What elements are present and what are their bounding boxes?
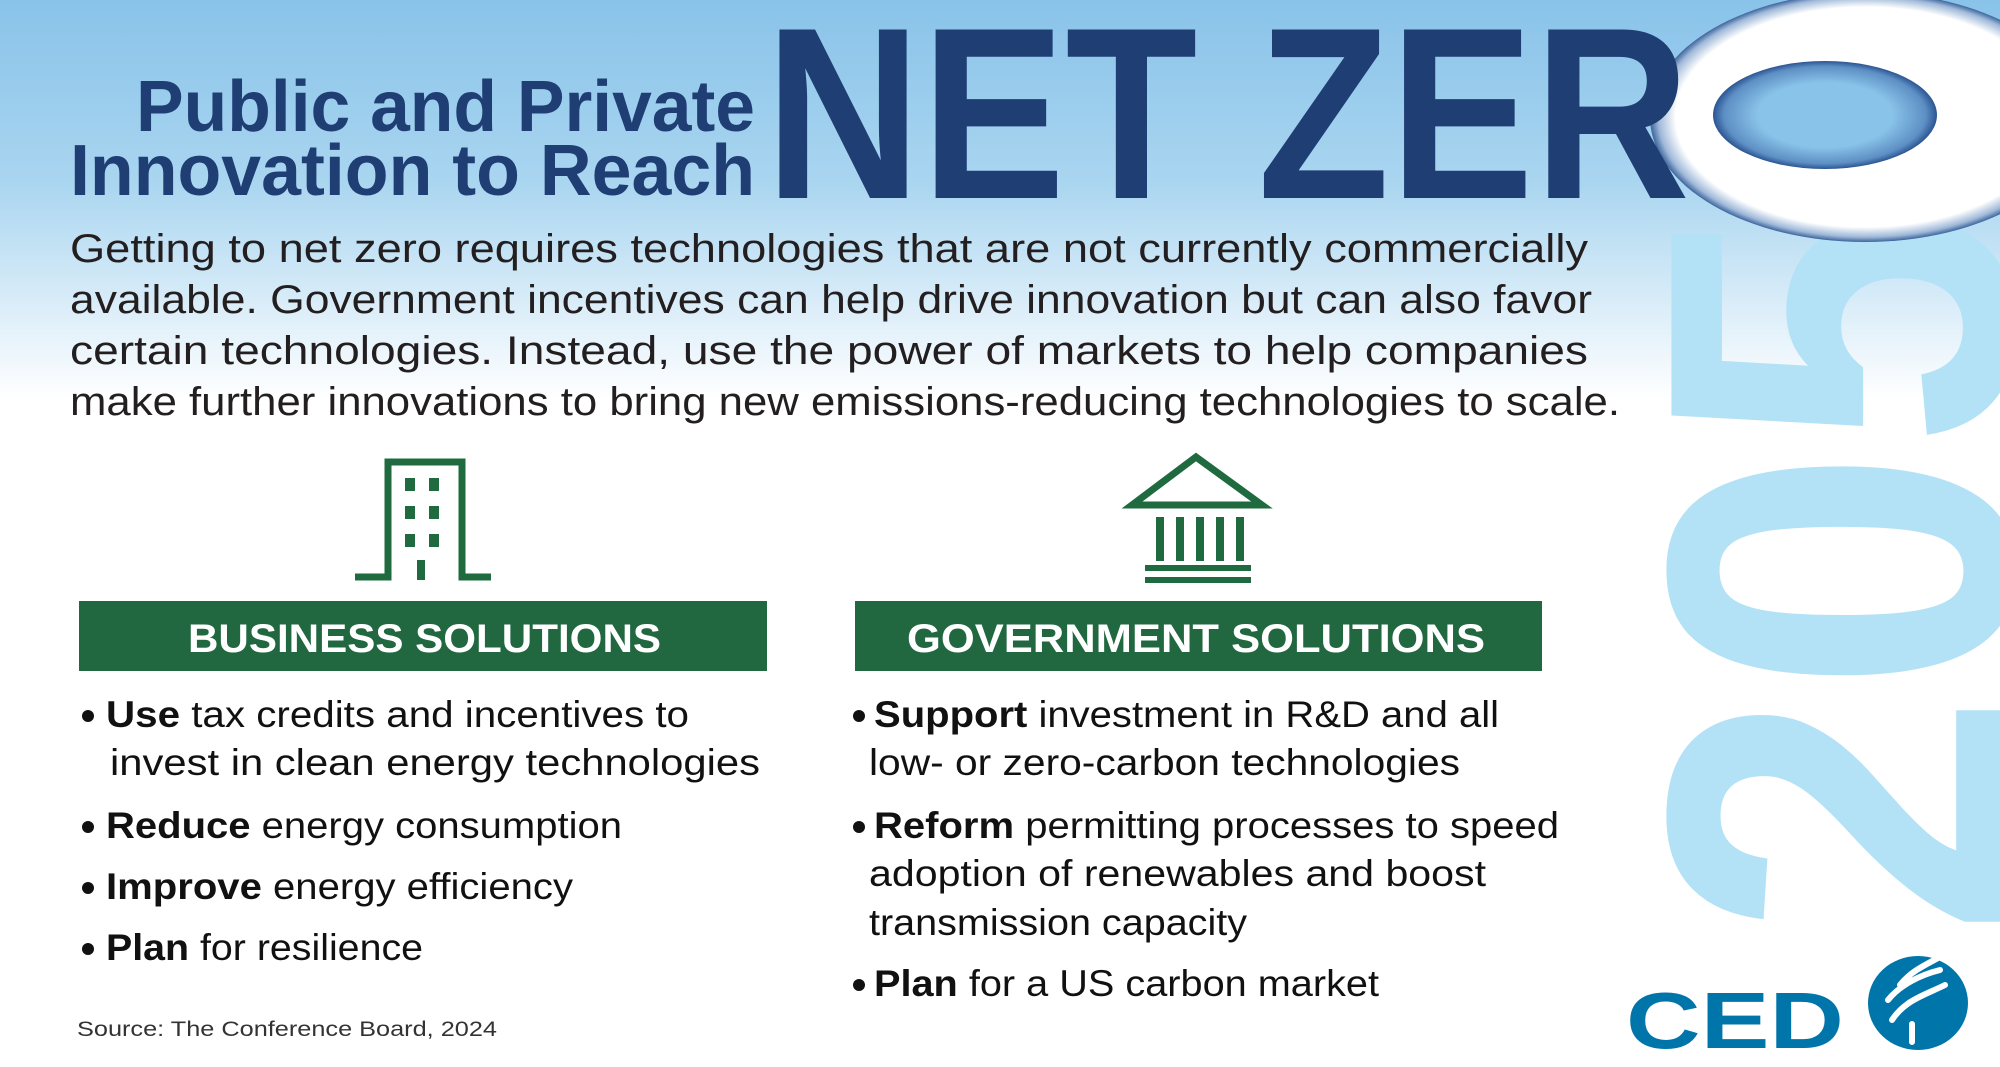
white O ring: [1650, 0, 2000, 242]
business bullet list: Plan for resilience: [106, 927, 423, 968]
business bullet list: Use tax credits and incentives to: [106, 694, 689, 735]
banner: business solutions: [79, 601, 767, 671]
icon: government building: [1132, 457, 1262, 583]
government bullet list: Reform permitting processes to speed: [874, 805, 1559, 846]
intro paragraph: [70, 227, 1620, 424]
government bullet list: adoption of renewables and boost: [869, 853, 1487, 894]
icon: office building: [355, 462, 491, 580]
business bullet list: Reduce energy consumption: [106, 805, 622, 846]
banner: government solutions: [855, 601, 1542, 671]
source note: Source: The Conference Board, 2024: [77, 1018, 497, 1041]
government bullet list: Plan for a US carbon market: [874, 963, 1380, 1004]
business bullet list: invest in clean energy technologies: [110, 742, 760, 783]
intro paragraph: make further innovations to bring new emissions-reducing technologies to scale.: [70, 380, 1620, 424]
intro paragraph: certain technologies. Instead, use the power of markets to help companies: [70, 329, 1588, 373]
title: [70, 67, 755, 211]
background gradient: [0, 0, 2000, 400]
government bullet list: transmission capacity: [869, 902, 1248, 943]
government bullet list: [853, 694, 1559, 1004]
intro paragraph: available. Government incentives can help drive innovation but can also favor: [70, 278, 1592, 322]
banner: government solutions: GOVERNMENT SOLUTIONS: [907, 617, 1485, 661]
CED logo: [1626, 956, 1968, 1065]
banner: business solutions: BUSINESS SOLUTIONS: [188, 617, 661, 661]
title: Innovation to Reach: [70, 131, 755, 211]
title: Public and Private: [136, 67, 755, 147]
business bullet list: [82, 694, 760, 968]
government bullet list: Support investment in R&D and all: [874, 694, 1499, 735]
business bullet list: Improve energy efficiency: [106, 866, 574, 907]
CED logo: CED: [1626, 976, 1844, 1065]
intro paragraph: Getting to net zero requires technologies that are not currently commercially: [70, 227, 1588, 271]
government bullet list: low- or zero-carbon technologies: [869, 742, 1460, 783]
